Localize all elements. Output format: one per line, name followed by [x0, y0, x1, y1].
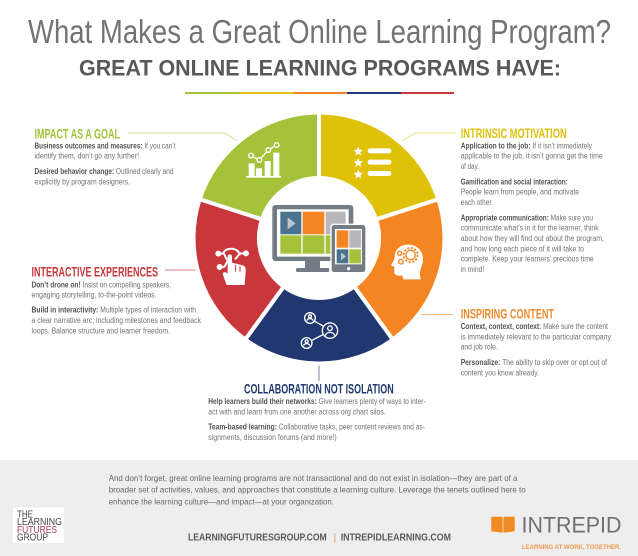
- text: interactive body: Don’t drone on! Insist on compelling speakers,: [32, 280, 171, 289]
- text: interactive body: loops. Balance structure and learner freedom.: [32, 326, 170, 335]
- panel: inspiring content: [461, 306, 611, 377]
- text: closing paragraph: [109, 473, 526, 506]
- heading: motivation: INTRINSIC MOTIVATION: [461, 125, 567, 141]
- text: interactive body: [32, 280, 201, 335]
- leader: interactive: [165, 269, 197, 271]
- text: closing paragraph: enhance the learning culture—and impact—at your organization.: [109, 496, 334, 506]
- text: impact body: identify them, don’t go any further!: [34, 152, 139, 161]
- rainbow divider: [185, 92, 454, 94]
- text: inspiring body: is immediately relevant to the particular company: [461, 332, 611, 341]
- text: collaboration body: signments, discussion forums (and more!): [208, 433, 337, 442]
- text: collaboration body: [208, 397, 426, 442]
- text: impact body: Desired behavior change: Outlined clearly and: [34, 167, 174, 176]
- leader: collaboration: [318, 360, 320, 381]
- text: motivation body: Gamification and social interaction:: [461, 177, 568, 186]
- logo: the learning futures group: LEARNING: [17, 517, 62, 528]
- logo: the learning futures group: GROUP: [17, 532, 48, 543]
- website links: INTREPIDLEARNING.COM: [341, 532, 451, 544]
- text: inspiring body: content you know already.: [461, 368, 539, 377]
- text: collaboration body: Help learners build their networks: Give learners plenty of ways to inter-: [208, 397, 426, 406]
- text: motivation body: communicate what’s in it for the learner, think: [461, 224, 599, 233]
- text: motivation body: and how long each piece of it will take to: [461, 244, 585, 253]
- logo: the learning futures group: THE: [17, 510, 33, 520]
- text: motivation body: Appropriate communication: Make sure you: [461, 213, 593, 222]
- text: inspiring body: Context, context, context: Make sure the content: [461, 322, 609, 331]
- text: motivation body: of day.: [461, 162, 479, 171]
- text: impact body: [34, 141, 176, 186]
- text: collaboration body: act with and learn from one another across org chart silos.: [208, 407, 386, 416]
- heading: impact: IMPACT AS A GOAL: [34, 125, 120, 141]
- icon: monitor and tablet: [272, 205, 367, 273]
- text: inspiring body: Personalize: The ability to skip over or opt out of: [461, 358, 608, 367]
- segment: motivation: [319, 112, 438, 219]
- text: interactive body: engaging storytelling, to-the-point videos.: [32, 291, 156, 300]
- text: motivation body: applicable to the job, it isn’t gonna get the time: [461, 152, 603, 161]
- segment: interactive: [193, 199, 284, 340]
- text: closing paragraph: And don’t forget, great online learning programs are not transactional and do not exist in isolation—they are part of a: [109, 473, 518, 483]
- subtitle: GREAT ONLINE LEARNING PROGRAMS HAVE:: [79, 56, 561, 80]
- icon: star checklist: [354, 147, 391, 179]
- heading: interactive: INTERACTIVE EXPERIENCES: [32, 264, 158, 280]
- segment: impact: [200, 112, 319, 219]
- text: interactive body: a clear narrative arc, including milestones and feedback: [32, 316, 201, 325]
- logo: intrepid: [491, 512, 622, 551]
- tagline: LEARNING AT WORK, TOGETHER.: [522, 544, 621, 551]
- text: motivation body: each other.: [461, 198, 493, 207]
- icon: hand touching nodes: [215, 249, 249, 285]
- icon: open book: [491, 516, 515, 533]
- text: motivation body: about how they will find out about the program,: [461, 234, 604, 243]
- text: collaboration body: Team-based learning: Collaborative tasks, peer content reviews and as-: [208, 423, 425, 432]
- website links: [188, 532, 451, 544]
- text: motivation body: in mind!: [461, 265, 484, 274]
- leader: motivation: [399, 133, 456, 143]
- text: impact body: explicitly by program designers.: [34, 177, 130, 186]
- icon: head with gears: [391, 245, 423, 279]
- text: impact body: Business outcomes and measures: If you can’t: [34, 141, 176, 150]
- panel: intrinsic motivation: [461, 125, 604, 274]
- text: inspiring body: [461, 322, 611, 377]
- website links: |: [334, 532, 336, 544]
- segment: collaboration: [245, 287, 393, 364]
- donut chart: [128, 112, 456, 381]
- logo: the learning futures group: [13, 508, 64, 543]
- icon: network of people: [301, 313, 338, 348]
- segment: inspiring: [354, 199, 445, 340]
- website links: LEARNINGFUTURESGROUP.COM: [188, 532, 327, 544]
- text: motivation body: Application to the job: If it isn’t immediately: [461, 141, 592, 150]
- text: interactive body: Build in interactivity: Multiple types of interaction with: [32, 306, 196, 315]
- wordmark: INTREPID: [522, 512, 622, 538]
- panel: interactive experiences: [32, 264, 201, 335]
- panel: footer: [0, 460, 638, 556]
- leader: impact: [128, 133, 240, 143]
- panel: collaboration not isolation: [208, 381, 426, 442]
- text: motivation body: complete. Keep your learners’ precious time: [461, 255, 594, 264]
- text: motivation body: People learn from people, and motivate: [461, 188, 580, 197]
- text: closing paragraph: broader set of activities, values, and approaches that constitute a learning culture. Leverage the tenets outlined here to: [109, 485, 526, 495]
- heading: collaboration: COLLABORATION NOT ISOLATION: [244, 381, 394, 397]
- text: motivation body: [461, 141, 604, 274]
- text: inspiring body: and job role.: [461, 343, 498, 352]
- leader: inspiring: [420, 314, 453, 316]
- heading: inspiring: INSPIRING CONTENT: [461, 306, 554, 322]
- logo: the learning futures group: FUTURES: [17, 525, 57, 536]
- panel: impact as a goal: [34, 125, 176, 186]
- icon: bar chart: [246, 143, 281, 178]
